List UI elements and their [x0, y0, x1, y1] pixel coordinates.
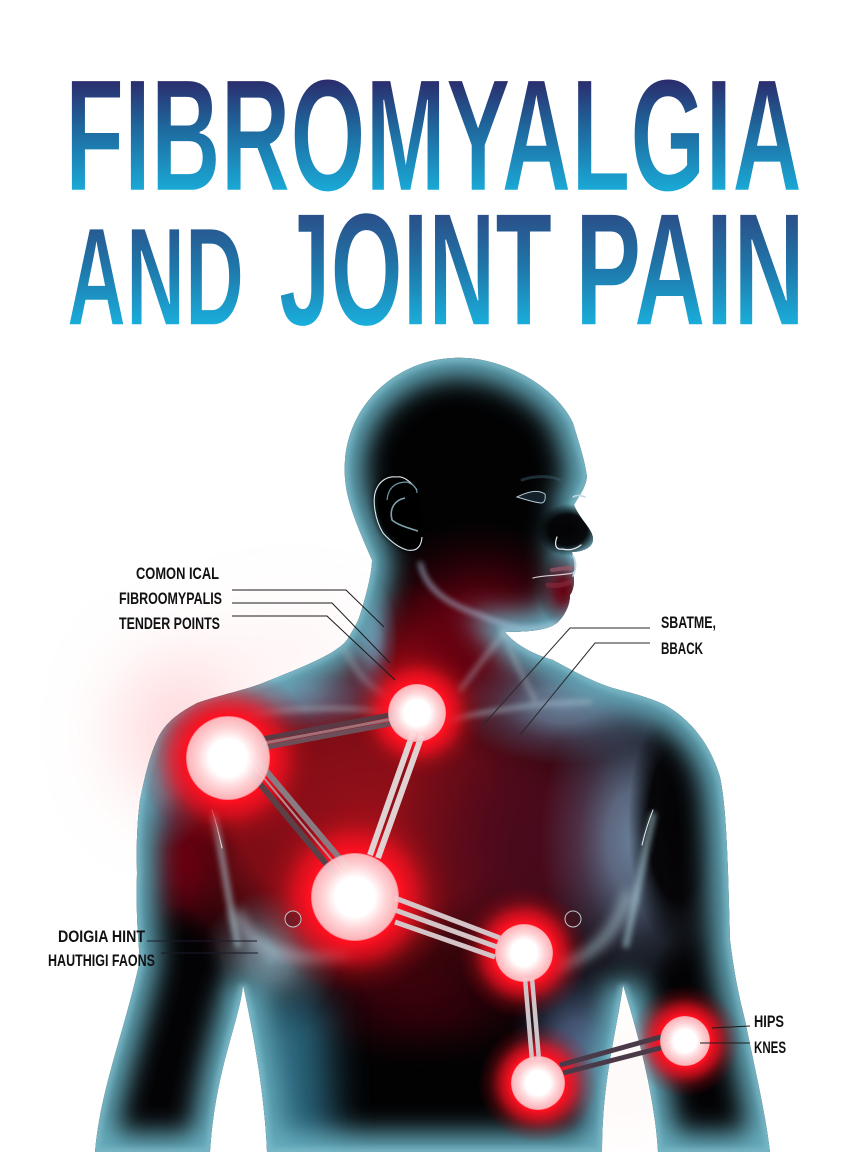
callout: back: SBATME, [661, 614, 716, 632]
connector: chest to lower rib [395, 898, 500, 957]
title word: JOINT: JOINT [279, 180, 552, 360]
callout: tender points: COMON ICAL [136, 565, 219, 583]
marker: neck [388, 684, 446, 742]
marker: shoulder [186, 716, 270, 800]
neck and chest highlights [264, 628, 593, 722]
callout: lower left: DOIGIA HINT [58, 928, 145, 946]
dark body base [95, 358, 770, 1152]
callout: tender points: TENDER POINTS [119, 615, 220, 633]
brow [522, 477, 560, 480]
callout: tender points [119, 565, 395, 680]
connector: shoulder to neck [262, 714, 395, 748]
blue grey shoulder and chest light [144, 595, 706, 1151]
callout: hips and knees: HIPS [754, 1013, 784, 1031]
connector: hip to elbow [560, 1036, 664, 1073]
jaw line highlight [420, 562, 558, 629]
human figure [95, 358, 770, 1152]
red interior [146, 534, 618, 1055]
marker: chest [311, 853, 399, 941]
callout: hips and knees: KNES [754, 1039, 786, 1057]
nose [556, 537, 581, 550]
callout: lower left: HAUTHIGI FAONS [48, 952, 155, 970]
icon: face details [517, 477, 585, 585]
teal rim light [95, 358, 770, 1152]
far eye [573, 496, 585, 497]
marker: lower rib [495, 924, 553, 982]
connector: shoulder to chest [250, 760, 347, 877]
connector lines between tender points [250, 714, 664, 1073]
nipples [285, 911, 581, 927]
red glow around tender points [136, 647, 741, 1143]
callout: lower left [48, 928, 258, 970]
lips [533, 573, 573, 578]
face shadow over nose and chin [540, 504, 593, 624]
callout: tender points: FIBROOMYPALIS [119, 590, 222, 608]
dark arm shapes [168, 716, 715, 984]
title [65, 46, 805, 360]
callout: back: BBACK [661, 640, 703, 658]
armpit creases and pectoral arcs [212, 810, 653, 965]
connector: rib to hip [525, 978, 539, 1060]
marker: hip [511, 1056, 565, 1110]
title word: AND: AND [67, 198, 244, 355]
callout: hips and knees [700, 1013, 786, 1057]
callout: back [484, 614, 716, 735]
connector: neck to chest [370, 733, 422, 858]
tender point markers [186, 684, 710, 1110]
glow behind left shoulder [125, 630, 650, 1140]
eye [517, 491, 545, 503]
marker: elbow [660, 1016, 710, 1066]
icon: ear [374, 477, 423, 550]
